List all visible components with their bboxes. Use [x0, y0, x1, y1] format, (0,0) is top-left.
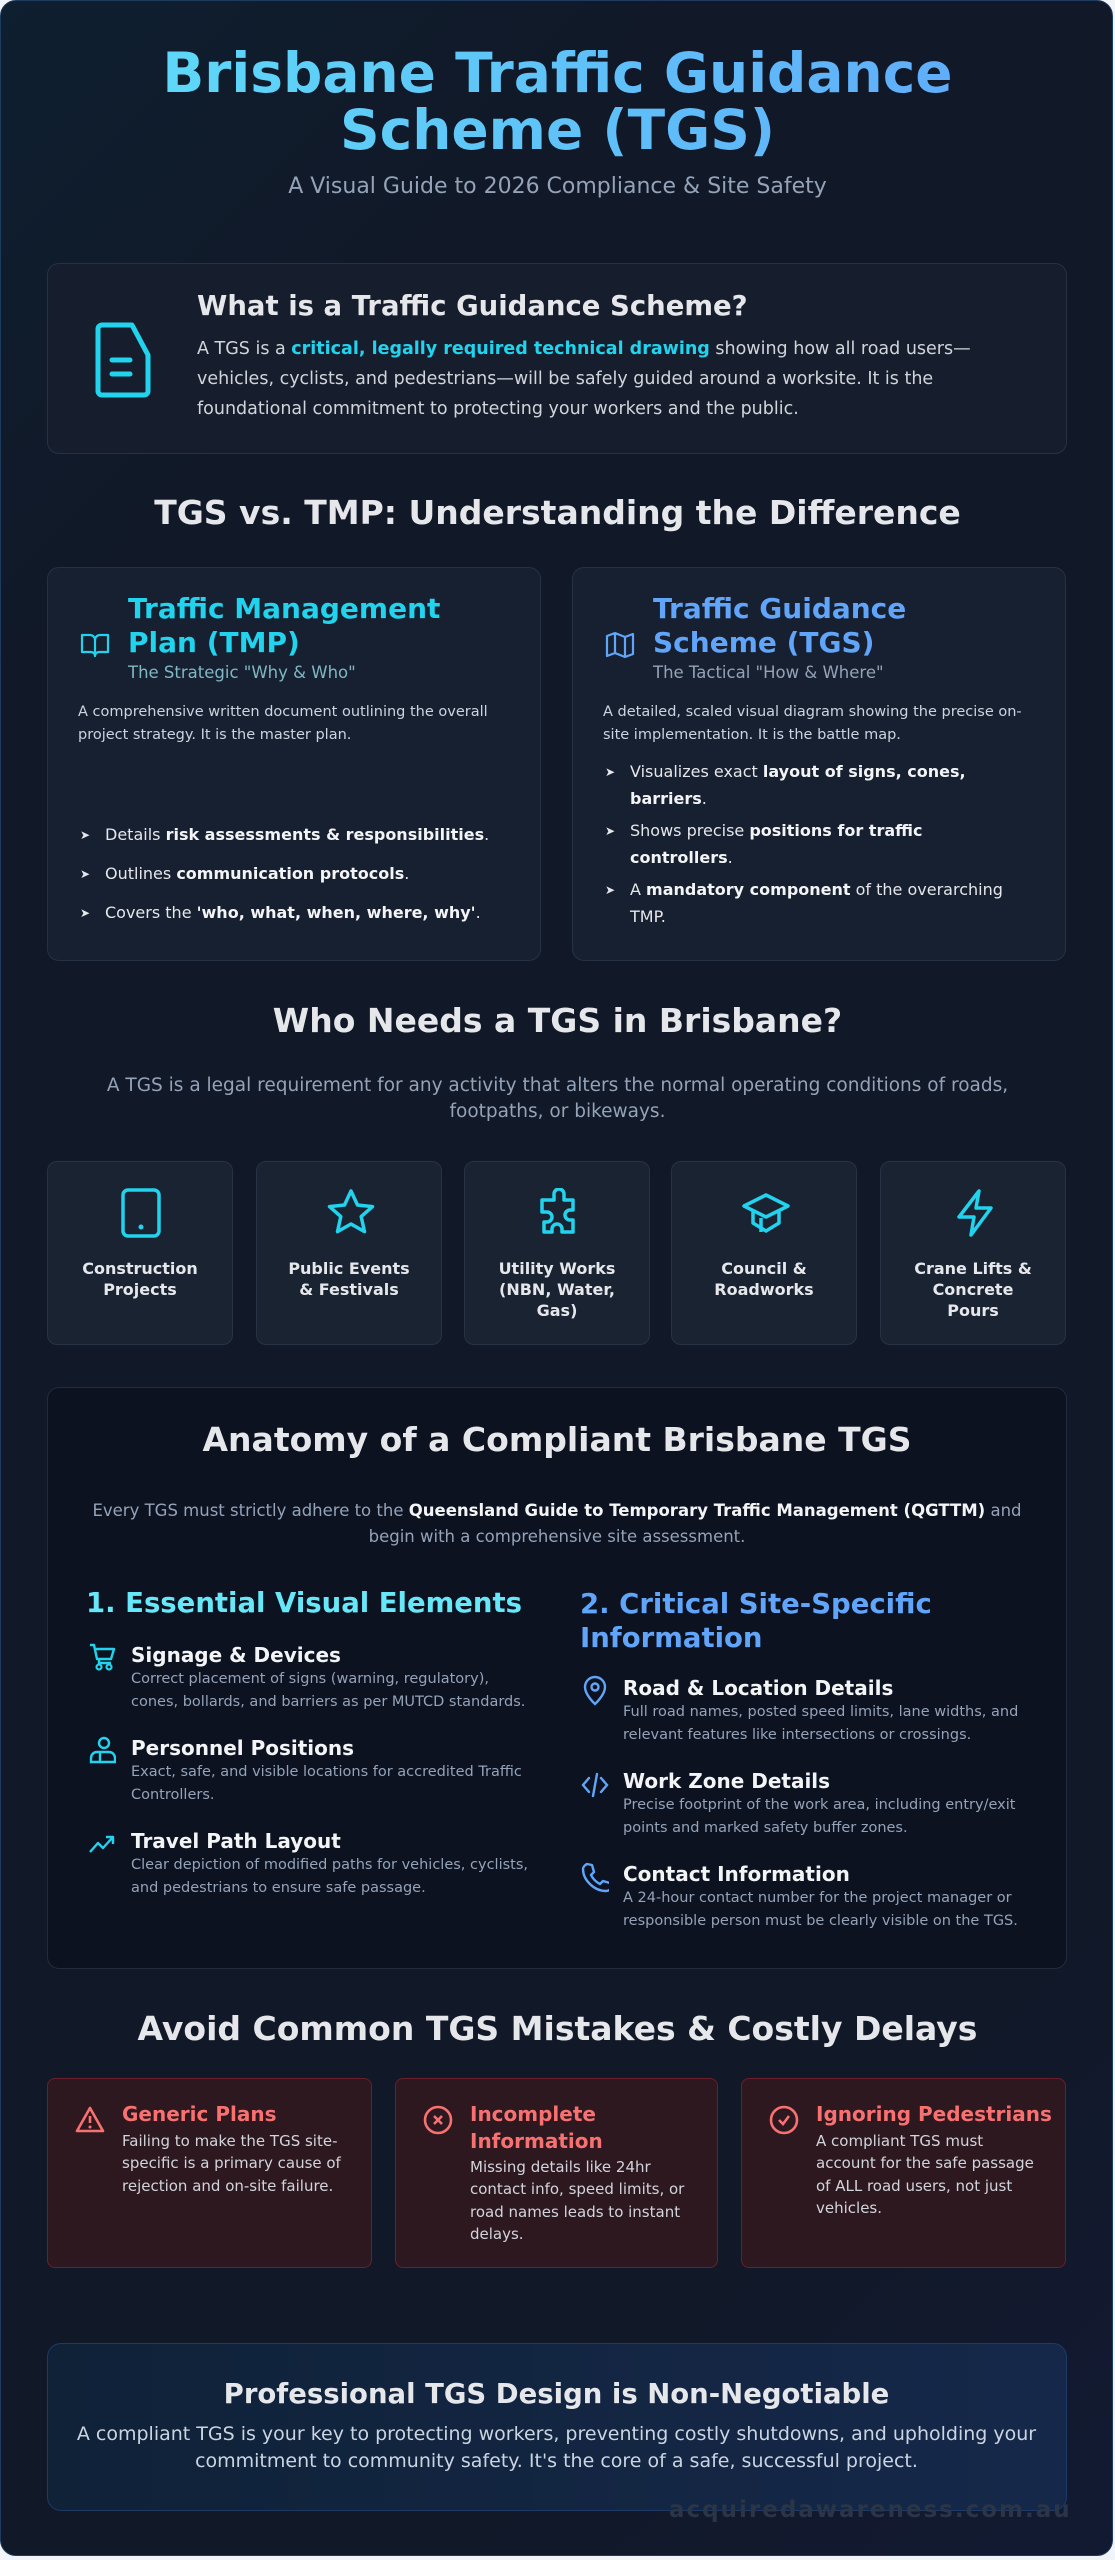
title: Scheme (TGS)	[653, 626, 874, 659]
icon: document	[96, 322, 150, 398]
card: generic plans	[47, 2078, 372, 2268]
icon: puzzle	[540, 1188, 575, 1234]
card: incomplete info: Information	[470, 2129, 603, 2153]
card: pedestrians: Ignoring Pedestrians	[816, 2102, 1052, 2126]
tile: crane: Concrete	[933, 1280, 1013, 1299]
icon: grad cap	[742, 1193, 790, 1233]
tile: crane: Pours	[947, 1301, 999, 1320]
heading: Professional TGS Design is Non-Negotiable	[224, 2378, 889, 2410]
tile: utility: Gas)	[537, 1301, 577, 1320]
panel: TMP: Covers the 'who, what, when, where, why'.	[105, 903, 481, 922]
icon: map	[606, 632, 634, 658]
tile: construction: Construction	[82, 1259, 198, 1278]
title: Traffic Management	[128, 592, 440, 625]
icon: x circle	[424, 2106, 452, 2134]
tile: events	[256, 1161, 442, 1345]
icon: tablet	[121, 1188, 161, 1238]
heading: Anatomy of a Compliant Brisbane TGS	[203, 1420, 911, 1459]
column 2 heading: 2. Critical Site-Specific Information	[580, 1588, 932, 1654]
title: Scheme (TGS)	[340, 98, 775, 162]
card: generic plans: Failing to make the TGS site-specific is a primary cause of rejection and on-site failure.	[122, 2132, 341, 2195]
item: travel path	[89, 1829, 528, 1896]
intro: Every TGS must strictly adhere to the Queensland Guide to Temporary Traffic Management (QGTTM) and begin with a comprehensive site assessment.	[92, 1501, 1022, 1546]
item: contact: Contact Information	[623, 1862, 850, 1886]
icon: bolt	[957, 1189, 993, 1237]
bullets	[81, 825, 489, 922]
tile: construction: Projects	[103, 1280, 177, 1299]
item: road: Full road names, posted speed limits, lane widths, and relevant features like intersections or crossings.	[623, 1704, 1018, 1743]
item: signage	[90, 1643, 525, 1710]
tile: construction	[47, 1161, 233, 1345]
item: work zone: Work Zone Details	[623, 1769, 830, 1793]
title	[653, 592, 906, 659]
bullets	[606, 762, 1003, 926]
subtitle: The Tactical "How & Where"	[653, 663, 884, 682]
subtitle: A Visual Guide to 2026 Compliance & Site Safety	[288, 174, 827, 199]
panel: what is TGS	[47, 263, 1067, 454]
item: signage: Signage & Devices	[131, 1643, 341, 1667]
item: personnel	[90, 1736, 522, 1803]
item: signage: Correct placement of signs (warning, regulatory), cones, bollards, and barriers as per MUTCD standards.	[131, 1671, 525, 1710]
tile: utility: (NBN, Water,	[499, 1280, 615, 1299]
tile: events: Public Events	[288, 1259, 410, 1278]
item: road: Road & Location Details	[623, 1676, 893, 1700]
panel: TGS: Shows precise positions for traffic controllers.	[630, 821, 922, 867]
card: pedestrians: A compliant TGS must account for the safe passage of ALL road users, not just vehicles.	[816, 2132, 1034, 2217]
card: generic plans: Generic Plans	[122, 2102, 276, 2126]
title	[128, 592, 440, 659]
heading: TGS vs TMP: TGS vs. TMP: Understanding the Difference	[154, 493, 961, 532]
item: travel path: Clear depiction of modified paths for vehicles, cyclists, and pedestrians to ensure safe passage.	[131, 1857, 528, 1896]
item: travel path: Travel Path Layout	[131, 1829, 341, 1853]
panel: conclusion	[47, 2343, 1067, 2511]
item: contact	[582, 1862, 1018, 1929]
title: Traffic Guidance	[653, 592, 906, 625]
icon: warning	[76, 2106, 104, 2132]
tile: utility	[464, 1161, 650, 1345]
panel: TGS	[572, 567, 1066, 961]
item: road	[584, 1676, 1018, 1743]
body text: A TGS is a critical, legally required technical drawing showing how all road users—vehicles, cyclists, and pedestrians—will be safely guided around a worksite. It is the foundational commitment to protecting your workers and the public.	[197, 339, 971, 419]
icon: check circle	[770, 2106, 798, 2134]
icon: star	[328, 1189, 374, 1234]
card: incomplete info	[395, 2078, 718, 2268]
panel: TMP	[47, 567, 541, 961]
panel: TGS: Visualizes exact layout of signs, cones, barriers.	[630, 762, 966, 808]
description: A comprehensive written document outlining the overall project strategy. It is the master plan.	[78, 704, 488, 743]
tile: utility: Utility Works	[499, 1259, 615, 1278]
item: work zone	[582, 1769, 1016, 1836]
tile: crane: Crane Lifts &	[914, 1259, 1032, 1278]
item: contact: A 24-hour contact number for the project manager or responsible person must be clearly visible on the TGS.	[623, 1890, 1018, 1929]
heading: What is a Traffic Guidance Scheme?	[197, 290, 748, 322]
heading: who needs: Who Needs a TGS in Brisbane?	[273, 1001, 842, 1040]
item: personnel: Personnel Positions	[131, 1736, 354, 1760]
panel: TMP: Details risk assessments & responsibilities.	[105, 825, 489, 844]
panel: TMP: Outlines communication protocols.	[105, 864, 409, 883]
title	[1, 45, 1114, 159]
description: A detailed, scaled visual diagram showing the precise on-site implementation. It is the battle map.	[603, 704, 1022, 743]
item: personnel: Exact, safe, and visible locations for accredited Traffic Controllers.	[131, 1764, 522, 1803]
card: incomplete info: Incomplete	[470, 2102, 596, 2126]
watermark: acquiredawareness.com.au	[669, 2497, 1072, 2523]
heading: mistakes: Avoid Common TGS Mistakes & Costly Delays	[138, 2009, 977, 2048]
card: pedestrians	[741, 2078, 1066, 2268]
intro text: A TGS is a legal requirement for any activity that alters the normal operating conditions of roads, footpaths, or bikeways.	[107, 1075, 1008, 1122]
title: Brisbane Traffic Guidance	[162, 41, 953, 105]
panel: anatomy	[47, 1387, 1067, 1969]
item: work zone: Precise footprint of the work area, including entry/exit points and marked safety buffer zones.	[623, 1797, 1015, 1836]
tile: events: & Festivals	[299, 1280, 399, 1299]
body: A compliant TGS is your key to protecting workers, preventing costly shutdowns, and upholding your commitment to community safety. It's the core of a safe, successful project.	[77, 2423, 1036, 2472]
icon: book	[80, 634, 110, 658]
subtitle: The Strategic "Why & Who"	[128, 663, 356, 682]
card: incomplete info: Missing details like 24hr contact info, speed limits, or road names leads to instant delays.	[470, 2158, 684, 2243]
tile: council: Council &	[721, 1259, 807, 1278]
column 1 heading: 1. Essential Visual Elements	[86, 1587, 522, 1619]
tile: council: Roadworks	[714, 1280, 814, 1299]
title: Plan (TMP)	[128, 626, 300, 659]
tile: council	[671, 1161, 857, 1345]
panel: TGS: A mandatory component of the overarching TMP.	[630, 880, 1003, 926]
tile: crane	[880, 1161, 1066, 1345]
